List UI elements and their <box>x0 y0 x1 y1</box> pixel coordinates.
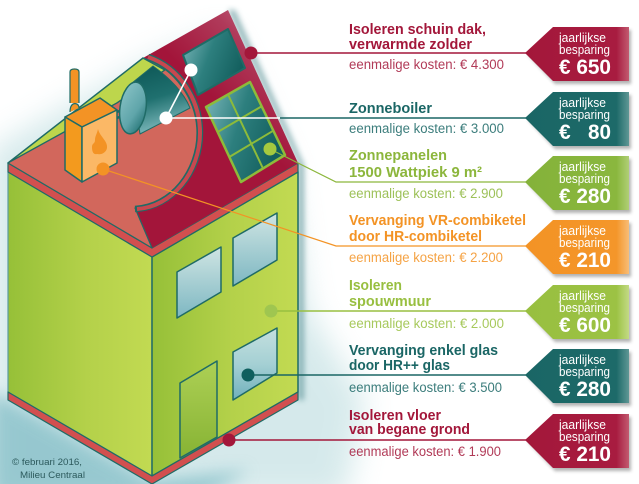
item: schuin dak: eenmalige kosten: € 4.300 <box>349 57 504 72</box>
house <box>8 10 298 484</box>
tag: 280 green: besparing <box>559 172 610 186</box>
item: enkel glas: eenmalige kosten: € 3.500 <box>349 380 502 395</box>
window upper right <box>233 213 277 286</box>
item: spouwmuur: eenmalige kosten: € 2.000 <box>349 316 504 331</box>
tag: 210 crimson: besparing <box>559 430 610 444</box>
tag: 280 teal: besparing <box>559 365 610 379</box>
tag: 600: jaarlijkse <box>558 289 606 303</box>
tag: 210 orange: jaarlijkse <box>558 224 606 238</box>
item: spouwmuur: spouwmuur <box>349 293 431 310</box>
tag: 280 teal: jaarlijkse <box>558 353 606 367</box>
item: combiketel: Vervanging VR-combiketel <box>349 212 526 229</box>
tag: 280 teal <box>525 349 629 403</box>
copyright: © februari 2016, <box>12 457 82 468</box>
item: zonnepanelen <box>349 147 503 201</box>
item: vloer <box>349 407 501 459</box>
copyright <box>12 457 85 481</box>
tag: 210 crimson: jaarlijkse <box>558 418 606 432</box>
item: zonneboiler: eenmalige kosten: € 3.000 <box>349 121 504 136</box>
item: vloer: eenmalige kosten: € 1.900 <box>349 444 501 459</box>
window lower <box>233 328 277 400</box>
right wall <box>152 172 298 476</box>
copyright: Milieu Centraal <box>20 470 85 481</box>
tag: 280 teal: € 280 <box>559 378 611 401</box>
tag: 80: € <box>559 121 571 144</box>
background glow around house <box>0 10 365 484</box>
tag: 600 <box>525 285 629 339</box>
item: spouwmuur: Isoleren <box>349 277 402 294</box>
item: enkel glas: door HR++ glas <box>349 357 450 374</box>
item: zonneboiler: Zonneboiler <box>349 100 432 117</box>
roof crimson <box>135 10 298 248</box>
tag: 80: jaarlijkse <box>558 96 606 110</box>
icon: flame <box>92 129 107 154</box>
item: spouwmuur <box>349 277 504 331</box>
item: vloer: van begane grond <box>349 421 470 438</box>
combi boiler <box>65 98 117 182</box>
floor band <box>8 392 298 484</box>
tag: 210 crimson <box>525 414 629 468</box>
item: zonnepanelen: 1500 Wattpiek 9 m² <box>349 164 482 181</box>
door <box>180 361 217 458</box>
tag shadows <box>528 30 631 471</box>
item: enkel glas <box>349 342 502 395</box>
attic arc edge <box>135 57 200 209</box>
tag: 80 <box>525 92 629 146</box>
tag: 650: besparing <box>559 43 610 57</box>
marker dots <box>96 46 278 446</box>
tag: 650: € 650 <box>559 56 611 79</box>
window upper left <box>177 247 221 318</box>
tag: 650 <box>525 27 629 81</box>
solar boiler tank <box>117 66 190 136</box>
item: enkel glas: Vervanging enkel glas <box>349 342 498 359</box>
tag: 80: 80 <box>588 121 611 144</box>
tag: 280 green: jaarlijkse <box>558 160 606 174</box>
item: vloer: Isoleren vloer <box>349 407 441 424</box>
left wall <box>8 172 152 476</box>
item: combiketel <box>349 212 526 265</box>
chimney pipe <box>70 69 79 112</box>
item: schuin dak: verwarmde zolder <box>349 36 472 53</box>
tag: 600: besparing <box>559 301 610 315</box>
tag: 210 orange: besparing <box>559 236 610 250</box>
tag: 210 crimson: € 210 <box>559 443 611 466</box>
leader lines <box>103 53 530 440</box>
tag: 280 green: € 280 <box>559 185 611 208</box>
attic floor <box>8 58 197 248</box>
tag: 600: € 600 <box>559 314 611 337</box>
tag: 280 green <box>525 156 629 210</box>
item: combiketel: door HR-combiketel <box>349 228 482 245</box>
item: zonnepanelen: eenmalige kosten: € 2.900 <box>349 186 503 201</box>
solar panel <box>206 82 285 182</box>
tag: 210 orange: € 210 <box>559 249 611 272</box>
item: zonnepanelen: Zonnepanelen <box>349 147 447 164</box>
item: zonneboiler <box>349 100 504 136</box>
item: schuin dak <box>349 21 504 72</box>
tag: 80: besparing <box>559 108 610 122</box>
item: schuin dak: Isoleren schuin dak, <box>349 21 486 38</box>
tag: 210 orange <box>525 220 629 274</box>
tag: 650: jaarlijkse <box>558 31 606 45</box>
roof window <box>183 29 245 95</box>
gable yellow-green <box>8 58 165 163</box>
roof band <box>8 163 298 257</box>
item: combiketel: eenmalige kosten: € 2.200 <box>349 250 503 265</box>
